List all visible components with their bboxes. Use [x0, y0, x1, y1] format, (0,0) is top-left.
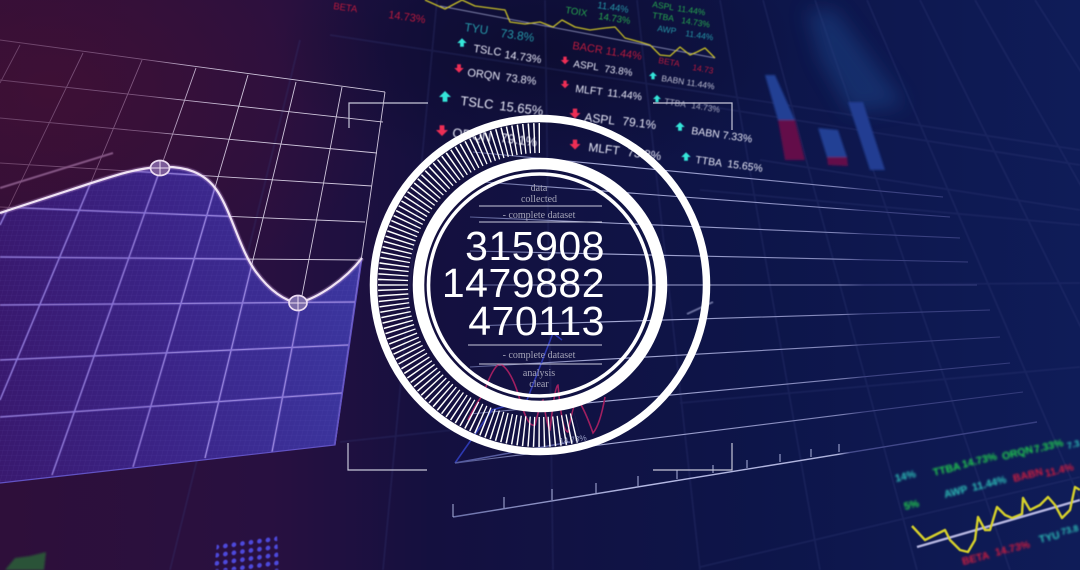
column 2 tickers: MLFT: [588, 140, 621, 158]
column 3 tickers: BETA: [658, 55, 681, 69]
column 3 tickers: BABN 11.44%: [661, 73, 716, 91]
corner brackets: [348, 103, 732, 470]
bottom right ticker table: 14%: [894, 468, 918, 485]
column 1 tickers: ORQN: [467, 67, 501, 83]
column 1 tickers: TSLC: [473, 43, 502, 59]
bottom caption: - complete dataset: [503, 350, 576, 361]
column 3 tickers: 14.73: [692, 62, 715, 76]
bottom right ticker table: 7.33%: [1033, 437, 1065, 456]
column 3 tickers: 14.73%: [691, 100, 721, 115]
column 1 tickers: TSLC: [460, 93, 494, 112]
top yellow line chart: [425, 0, 715, 58]
column 1 tickers: 79.1%: [500, 130, 538, 150]
column 1 tickers: 15.65%: [499, 98, 545, 118]
bottom right ticker table: 14.73%: [961, 450, 999, 471]
short diagonal stroke: [687, 302, 713, 314]
top cropped tickers: AWP: [657, 23, 677, 36]
trough marker: [289, 296, 307, 310]
top cropped tickers: 14.73%: [598, 11, 632, 27]
top caption: - complete dataset: [503, 210, 576, 221]
top caption: [503, 183, 576, 221]
blue dot matrix: [214, 535, 279, 570]
top cropped tickers: BETA: [333, 1, 359, 15]
numbers: 1479882: [442, 260, 605, 306]
bottom right ticker table: 5%: [903, 497, 921, 513]
column 1 tickers: [436, 20, 545, 150]
curve: [0, 167, 362, 303]
column 1 tickers: 73.8%: [500, 26, 536, 45]
thick inner ring: [418, 164, 662, 406]
blurred blue blob: [806, 10, 905, 112]
column 2 tickers: [561, 40, 662, 163]
column 1 tickers: TYU: [464, 20, 489, 37]
filled grid lines: [0, 170, 361, 476]
column 3 tickers: [649, 55, 764, 175]
column 1 tickers: 73.8%: [505, 72, 537, 88]
bottom right ticker table: BETA: [961, 549, 991, 568]
bottom right ticker table: TTBA: [932, 460, 962, 479]
bottom right ticker table: 73.8: [1060, 523, 1079, 537]
column 2 tickers: 73.8%: [627, 145, 662, 163]
column 3 tickers: BABN 7.33%: [691, 125, 753, 146]
axis with ticks: [453, 422, 1037, 517]
blue and red bars: [765, 75, 885, 170]
curve glow: [0, 167, 362, 303]
bottom right ticker table: [894, 437, 1080, 568]
bottom right ticker table: 11.4%: [1044, 461, 1076, 480]
bottom caption: clear: [529, 379, 549, 390]
upper grid lines: [0, 40, 385, 475]
vertical glow: [356, 140, 360, 183]
radial tick arc: [393, 138, 578, 432]
column 3 tickers: TTBA: [695, 154, 723, 170]
chart area fill: [0, 167, 362, 483]
column 3 tickers: TTBA: [664, 96, 687, 109]
top cropped tickers: 14.73%: [388, 9, 426, 26]
numbers: 315908: [465, 223, 605, 269]
top cropped tickers: 11.44%: [677, 3, 707, 17]
column 2 tickers: ASPL: [584, 110, 616, 128]
bottom right ticker table: AWP: [943, 483, 969, 501]
numbers: [442, 223, 605, 344]
bottom right ticker table: ORQN: [1001, 444, 1034, 463]
column 2 tickers: 79.1%: [622, 114, 657, 132]
top cropped tickers: 14.73%: [681, 15, 711, 30]
divider lines: [468, 206, 602, 364]
top cropped tickers: 11.44%: [597, 0, 630, 16]
top ticker table: [333, 0, 764, 175]
top cropped tickers: TTBA: [652, 10, 675, 23]
red wave chart: [468, 364, 605, 433]
right perspective lines: [456, 152, 1023, 463]
small percent label: 14.73%: [559, 433, 587, 446]
numbers: 470113: [468, 298, 605, 344]
top caption: data: [531, 183, 548, 194]
column 2 tickers: 11.44%: [607, 87, 643, 103]
column 2 tickers: 73.8%: [604, 64, 633, 79]
top cropped tickers: TOIX: [565, 5, 589, 20]
bottom caption: analysis: [523, 368, 555, 379]
top cropped tickers: 11.44%: [685, 28, 715, 42]
chart bottom edge: [0, 258, 362, 483]
bottom right ticker table: 11.44%: [971, 474, 1008, 494]
stray pink line: [0, 153, 113, 188]
blue line chart: [455, 333, 570, 463]
column 2 tickers: BACR 11.44%: [572, 40, 643, 63]
column 2 tickers: ASPL: [573, 59, 600, 74]
bottom right yellow line chart: [912, 487, 1080, 552]
column 1 tickers: 14.73%: [504, 49, 542, 66]
outer ring: [374, 118, 706, 452]
bottom right ticker table: 14.73%: [994, 538, 1032, 559]
column 3 tickers: 15.65%: [727, 158, 764, 175]
fine fill texture: [0, 167, 362, 483]
central dial: [374, 118, 706, 452]
bottom right ticker table: TYU: [1038, 529, 1061, 546]
top cropped tickers: [333, 0, 715, 42]
thin inner ring: [428, 174, 650, 396]
column 2 tickers: MLFT: [575, 83, 604, 98]
bottom caption: [503, 350, 576, 390]
top caption: collected: [521, 194, 557, 205]
peak marker: [150, 160, 170, 176]
column 1 tickers: ORQN: [452, 125, 492, 145]
bottom right ticker table: BABN: [1012, 466, 1044, 485]
left line chart: [0, 40, 385, 483]
green blur bottom-left: [5, 552, 46, 570]
